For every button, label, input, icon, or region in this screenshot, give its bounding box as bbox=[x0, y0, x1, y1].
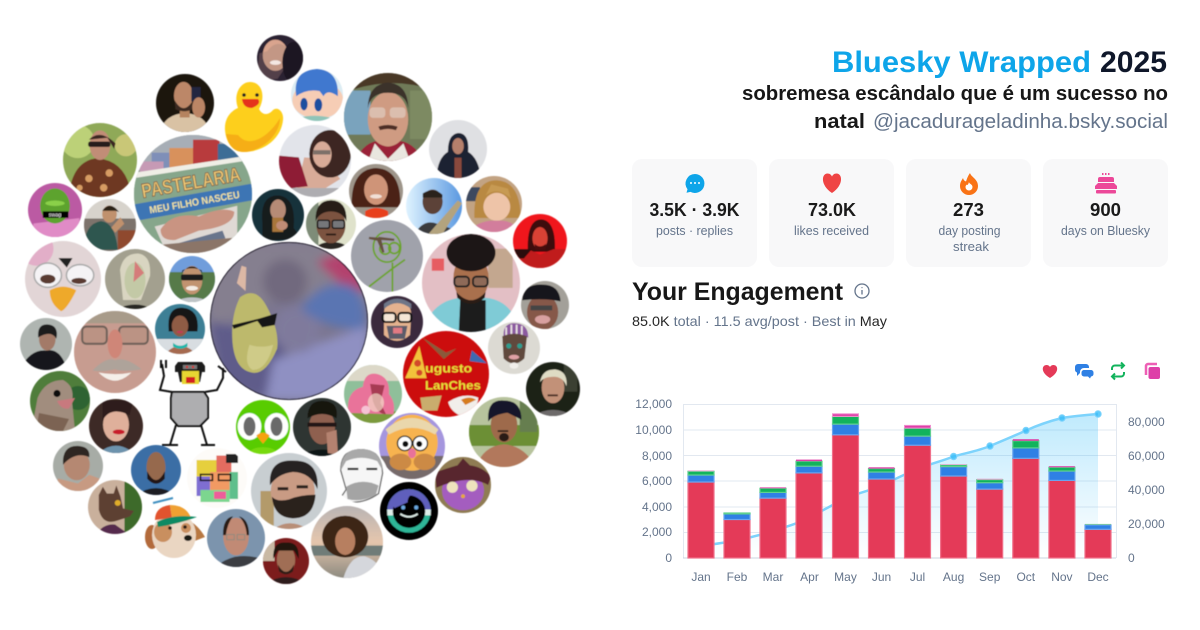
avatar: bearded sketch bbox=[334, 449, 388, 503]
icon: legend quotes bbox=[1146, 364, 1160, 379]
avatar: rubber duck bbox=[225, 82, 283, 152]
avatar: woman with teal necklace bbox=[155, 304, 205, 354]
avatar: pink pokemon bbox=[344, 365, 402, 423]
avatar: black circle logo bbox=[380, 482, 438, 540]
text: handle: @jacadurageladinha.bsky.social bbox=[873, 111, 1168, 133]
month labels bbox=[691, 570, 1109, 584]
avatar: clay mask bbox=[488, 322, 540, 374]
avatar: man with beer glass bbox=[252, 189, 304, 241]
avatar: old man with moustache bbox=[74, 311, 156, 393]
month labels: May bbox=[834, 570, 857, 584]
heading: display name: natal bbox=[814, 111, 865, 133]
avatar: blonde girl bbox=[466, 176, 522, 232]
avatar: Bowie painting bbox=[105, 249, 165, 309]
avatar: man with black cap bbox=[521, 281, 569, 330]
left axis labels: 0 bbox=[665, 551, 672, 565]
avatar: Jason Alexander portrait bbox=[207, 509, 265, 567]
panel: posts and replies: posts · replies bbox=[656, 223, 733, 238]
chart legend bbox=[1043, 362, 1160, 380]
left axis labels: 12,000 bbox=[635, 397, 672, 411]
avatar: blue helmet character bbox=[291, 69, 343, 126]
avatar: woman with sunglasses and floral shirt bbox=[61, 123, 137, 197]
month labels: Oct bbox=[1016, 570, 1036, 584]
avatar: pale young man bbox=[53, 441, 103, 491]
panel: days on Bluesky bbox=[1043, 159, 1168, 267]
panel: days on Bluesky: days on Bluesky bbox=[1061, 223, 1150, 238]
chart: monthly engagement stacked bars with cumulative line bbox=[635, 397, 1165, 584]
panel: days on Bluesky: 900 bbox=[1090, 200, 1121, 220]
left axis labels: 6,000 bbox=[642, 474, 672, 488]
left axis labels: 8,000 bbox=[642, 449, 672, 463]
panel: day posting streak bbox=[906, 159, 1031, 267]
month labels: Nov bbox=[1051, 570, 1073, 584]
avatar: man with curly hair at dusk bbox=[311, 506, 383, 578]
avatar: furby bbox=[24, 240, 102, 318]
y axis grid bbox=[683, 404, 1116, 558]
avatar: pear with sunglasses bbox=[210, 242, 368, 400]
stacked bars bbox=[688, 414, 1111, 558]
title: Bluesky Wrapped 2025: 2025 bbox=[1100, 46, 1167, 79]
text: engagement summary: 85.0K total · 11.5 avg/post · Best in May bbox=[632, 313, 887, 329]
avatar: colourful portrait bbox=[196, 453, 239, 503]
panel: likes received bbox=[769, 159, 894, 267]
panel: posts and replies: 3.5K · 3.9K bbox=[650, 200, 740, 220]
avatar: pixel monster bbox=[160, 360, 226, 445]
month labels: Aug bbox=[943, 570, 964, 584]
month labels: Jan bbox=[691, 570, 711, 584]
right axis labels: 20,000 bbox=[1128, 517, 1165, 531]
icon: legend replies bbox=[1075, 364, 1094, 378]
month labels: Dec bbox=[1087, 570, 1109, 584]
panel: day posting streak: 273 bbox=[953, 200, 984, 220]
avatar: potoo bird bbox=[30, 371, 90, 431]
avatar: dog with propeller cap bbox=[145, 498, 205, 558]
avatar: woman with curly red-brown hair bbox=[349, 164, 403, 218]
avatar: blond man bbox=[526, 362, 580, 416]
avatar: duolingo owl bbox=[236, 400, 290, 458]
icon: heart bbox=[823, 174, 841, 193]
avatar: woman with long dark hair bbox=[429, 120, 487, 178]
avatar cluster bbox=[19, 35, 580, 584]
icon: flame bbox=[960, 173, 978, 195]
avatar: wolf in purple bbox=[88, 480, 143, 534]
panel: likes received: 73.0K bbox=[808, 200, 856, 220]
avatar: man in leather jacket bbox=[20, 318, 72, 370]
right axis labels: 0 bbox=[1128, 551, 1135, 565]
title: Bluesky Wrapped 2025: Bluesky Wrapped bbox=[832, 46, 1091, 79]
icon: chat bubble bbox=[686, 174, 704, 193]
avatar: man with cap in park bbox=[469, 397, 539, 467]
heading: display name bbox=[742, 83, 1168, 133]
month labels: Jul bbox=[910, 570, 925, 584]
avatar: Augusto Lanches logo bbox=[403, 331, 489, 417]
avatar: man looking down under blue sky bbox=[406, 178, 462, 234]
avatar: man in green shirt bbox=[84, 199, 136, 252]
panel: day posting streak: day posting bbox=[938, 223, 1000, 238]
cumulative area and line bbox=[701, 411, 1101, 558]
icon: cake bbox=[1095, 173, 1117, 194]
avatar: green stick figure drawing bbox=[351, 220, 423, 292]
month labels: Apr bbox=[800, 570, 819, 584]
panel: likes received: likes received bbox=[794, 223, 869, 238]
avatar: man with sunglasses and blue sky bbox=[169, 256, 215, 302]
heading: display name: sobremesa escândalo que é um sucesso no bbox=[742, 83, 1168, 105]
right axis labels: 80,000 bbox=[1128, 415, 1165, 429]
left axis labels: 2,000 bbox=[642, 525, 672, 539]
avatar: man with dark beard bbox=[251, 453, 327, 529]
avatar: man in red light bbox=[513, 214, 567, 268]
heading: Your Engagement: Your Engagement bbox=[632, 278, 844, 306]
avatar: woman smiling bbox=[257, 35, 305, 83]
avatar: woman reclining in red bbox=[279, 125, 351, 199]
avatar: man with hands on face bbox=[293, 398, 351, 456]
left axis labels: 10,000 bbox=[635, 423, 672, 437]
avatar: bearded man on red wall bbox=[263, 538, 309, 584]
month labels: Sep bbox=[979, 570, 1001, 584]
icon: info bbox=[855, 284, 869, 298]
month labels: Feb bbox=[727, 570, 748, 584]
avatar: man with thick glasses bbox=[306, 199, 356, 249]
avatar: pixel man with glasses bbox=[371, 296, 423, 348]
avatar: woman with red lipstick bbox=[89, 399, 143, 453]
avatar: man with glasses and moustache bbox=[344, 73, 432, 161]
avatar: green candy character bbox=[28, 183, 82, 237]
avatar: orange cartoon chef bbox=[379, 413, 445, 479]
month labels: Jun bbox=[872, 570, 891, 584]
left axis labels: 4,000 bbox=[642, 500, 672, 514]
month labels: Mar bbox=[763, 570, 783, 584]
avatar: man with afro and blue shirt bbox=[422, 234, 520, 332]
avatar: man with phone bbox=[155, 73, 215, 133]
panel: posts and replies bbox=[632, 159, 757, 267]
avatar: Pastelaria meme bbox=[131, 135, 254, 253]
icon: legend reposts bbox=[1112, 362, 1124, 380]
panel: day posting streak: streak bbox=[953, 239, 990, 254]
right axis labels: 60,000 bbox=[1128, 449, 1165, 463]
right axis labels: 40,000 bbox=[1128, 483, 1165, 497]
avatar: purple creature with hat bbox=[435, 457, 491, 513]
icon: legend heart bbox=[1043, 365, 1057, 378]
left axis labels bbox=[635, 397, 672, 565]
avatar: bald man on blue bbox=[131, 445, 181, 495]
right axis labels bbox=[1128, 415, 1165, 565]
